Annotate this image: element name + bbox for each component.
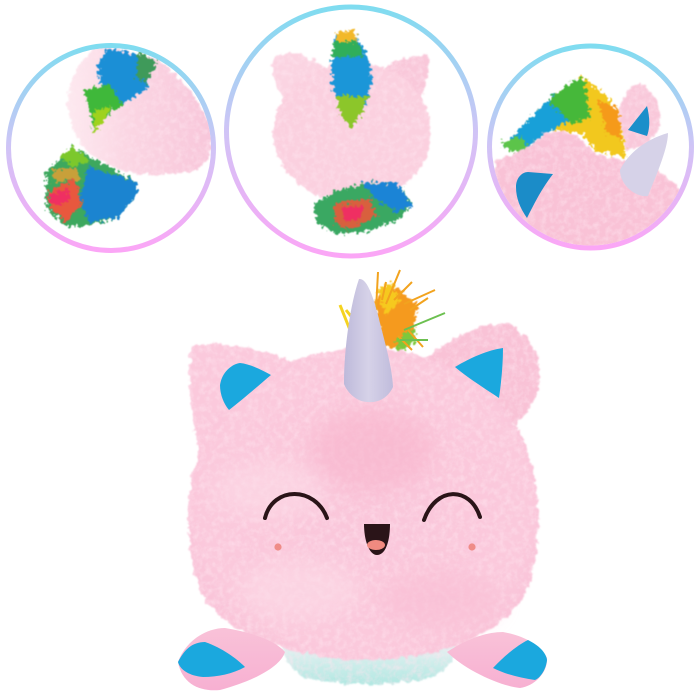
right inner ear — [455, 348, 503, 398]
top view left ear inner — [516, 172, 553, 218]
left foot — [178, 628, 285, 690]
top view horn — [620, 133, 668, 196]
back view tail — [314, 182, 412, 234]
left inner ear — [220, 363, 271, 410]
mouth — [364, 524, 390, 555]
inset circle: left, side view with tail — [8, 46, 214, 250]
mane on side view — [84, 48, 158, 132]
top view ear right — [618, 84, 660, 150]
back view mane — [332, 30, 372, 128]
body fur shading — [215, 408, 500, 630]
plush side body — [68, 46, 212, 175]
top view body — [495, 131, 682, 250]
back view ears — [270, 52, 324, 97]
belly teal base — [282, 640, 456, 684]
left cheek — [274, 543, 282, 551]
left ear — [190, 344, 292, 470]
right eye — [424, 494, 480, 520]
tail on side view — [46, 146, 138, 226]
right cheek — [468, 543, 476, 551]
right ear — [427, 323, 540, 425]
top view mane — [500, 76, 626, 158]
main plush unicorn cat — [178, 270, 547, 690]
inset circle: centre, back view — [226, 7, 476, 256]
back view body — [273, 62, 431, 202]
furry body — [188, 348, 538, 660]
main mane behind horn — [340, 270, 445, 352]
horn — [344, 279, 393, 402]
left eye — [265, 494, 327, 518]
inset circle: right, top view with horn — [490, 46, 692, 250]
right foot — [447, 632, 547, 688]
